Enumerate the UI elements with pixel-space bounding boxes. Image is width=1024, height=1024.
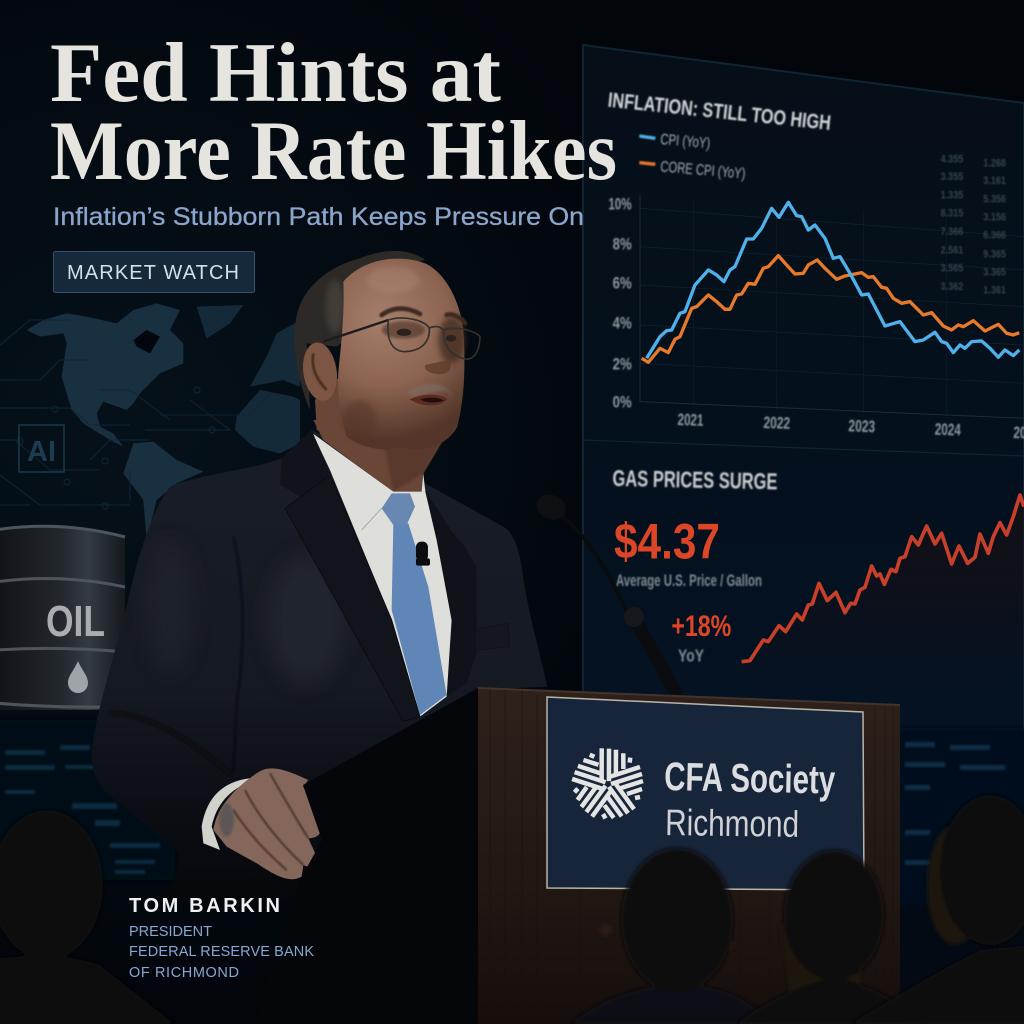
podium front	[478, 688, 900, 1024]
audience silhouettes	[0, 795, 1024, 1024]
price caption: Average U.S. Price / Gallon	[616, 571, 762, 590]
x axis labels: 2023	[848, 416, 875, 436]
x axis labels: 2021	[677, 410, 704, 430]
podium	[255, 688, 900, 1024]
sleeve fold	[110, 713, 230, 773]
world map	[27, 303, 300, 540]
icon: CFA logo	[570, 745, 643, 822]
x axis labels: 2024	[934, 420, 962, 440]
eyebrows	[382, 309, 465, 323]
breast pocket	[478, 623, 509, 650]
screen	[583, 45, 1024, 770]
x axis labels	[677, 410, 1024, 443]
data table: 3.362	[941, 281, 963, 293]
tag: market watch: MARKET WATCH	[67, 262, 239, 284]
face	[338, 259, 464, 450]
temple grey	[326, 280, 344, 333]
suit	[92, 430, 547, 900]
right lapel	[425, 490, 477, 697]
price: $4.37	[614, 513, 720, 569]
eyes	[397, 329, 411, 336]
data table: 9.365	[983, 248, 1006, 260]
neck	[313, 420, 455, 492]
neck shadow	[383, 440, 443, 492]
legend: core CPI: CORE CPI (YoY)	[660, 158, 746, 183]
hair	[294, 251, 425, 410]
tag: market watch	[54, 252, 254, 292]
legend: CPI: CPI (YoY)	[660, 131, 711, 152]
data table: 3.365	[983, 266, 1006, 278]
tie	[382, 493, 447, 715]
sleeve seam	[233, 537, 243, 773]
title	[50, 26, 617, 198]
CPI line	[647, 202, 1019, 358]
title: Fed Hints at	[50, 26, 501, 120]
subtitle: Inflation’s Stubborn Path Keeps Pressure On	[53, 203, 584, 231]
icon: oil drop	[68, 661, 88, 693]
y axis labels	[608, 194, 632, 411]
person: centre right	[735, 850, 925, 1024]
oil barrel	[0, 525, 125, 710]
glasses	[323, 318, 480, 359]
circuit lines and AI chip	[0, 320, 270, 509]
x axis labels: 2022	[763, 413, 790, 433]
gas line	[742, 495, 1024, 662]
shirt	[313, 433, 452, 717]
microphone	[532, 490, 678, 696]
podium sign	[547, 697, 864, 890]
data table: 1.335	[941, 190, 963, 202]
y axis labels: 0%	[613, 392, 632, 411]
bottom right data wall	[898, 728, 1024, 1024]
eye shadow	[438, 317, 465, 363]
speaker caption	[129, 895, 314, 981]
y axis labels: 8%	[613, 234, 632, 253]
chart title: INFLATION: STILL TOO HIGH	[607, 88, 832, 135]
lapel mic	[416, 542, 430, 566]
y axis labels: 10%	[608, 194, 632, 213]
gas prices panel	[612, 465, 1024, 703]
y axis labels: 2%	[613, 354, 632, 373]
person: left	[0, 810, 175, 1024]
cheek shadow	[343, 400, 377, 440]
data table: 2.561	[941, 244, 963, 256]
moustache shadow	[407, 384, 453, 397]
legend: CPI	[639, 131, 711, 152]
sleeve highlight	[147, 540, 193, 673]
data table: 4.355	[941, 154, 963, 166]
inflation chart	[607, 88, 1024, 443]
data table: 3.355	[941, 171, 963, 183]
AI label: AI	[27, 436, 56, 468]
podium side	[255, 688, 478, 1024]
oil label: OIL	[46, 597, 105, 646]
jaw side	[315, 373, 360, 447]
data table: 3.161	[983, 175, 1006, 187]
mouth	[410, 395, 447, 405]
data table: 5.356	[983, 194, 1006, 206]
change: +18%	[671, 610, 731, 643]
YoY: YoY	[678, 645, 704, 665]
data table: 6.366	[983, 230, 1006, 242]
speaker caption: FEDERAL RESERVE BANK	[129, 944, 314, 960]
data table	[941, 154, 1006, 296]
legend: core CPI	[639, 158, 746, 183]
head	[294, 251, 480, 450]
hand	[213, 768, 322, 879]
data table: 8.315	[941, 208, 963, 220]
speaker caption: OF RICHMOND	[129, 965, 239, 981]
divider	[583, 440, 1024, 456]
data table: 1.361	[983, 284, 1006, 296]
gas area	[742, 495, 1024, 703]
torso	[92, 420, 547, 900]
sign text: CFA Society	[664, 755, 836, 803]
y axis labels: 4%	[613, 314, 632, 333]
bottom left data wall	[0, 720, 175, 880]
speaker	[92, 251, 547, 900]
data table: 7.366	[941, 226, 963, 238]
person: right	[850, 795, 1024, 1024]
nose	[425, 360, 451, 374]
speaker caption: TOM BARKIN	[129, 895, 280, 917]
cuff	[202, 778, 250, 850]
y axis labels: 6%	[613, 274, 632, 293]
suit highlight	[267, 557, 347, 683]
gas heading: GAS PRICES SURGE	[612, 465, 778, 494]
data table: 3.565	[941, 263, 963, 275]
ear	[299, 340, 341, 403]
core CPI line	[642, 256, 1019, 362]
speaker caption: PRESIDENT	[129, 924, 212, 940]
data table: 3.156	[983, 212, 1006, 224]
podium sign: Richmond	[665, 802, 799, 845]
left lapel	[280, 430, 330, 498]
title: More Rate Hikes	[50, 104, 617, 198]
person: centre	[570, 848, 770, 1024]
data table: 1.268	[983, 158, 1006, 170]
forehead highlight	[367, 267, 420, 293]
